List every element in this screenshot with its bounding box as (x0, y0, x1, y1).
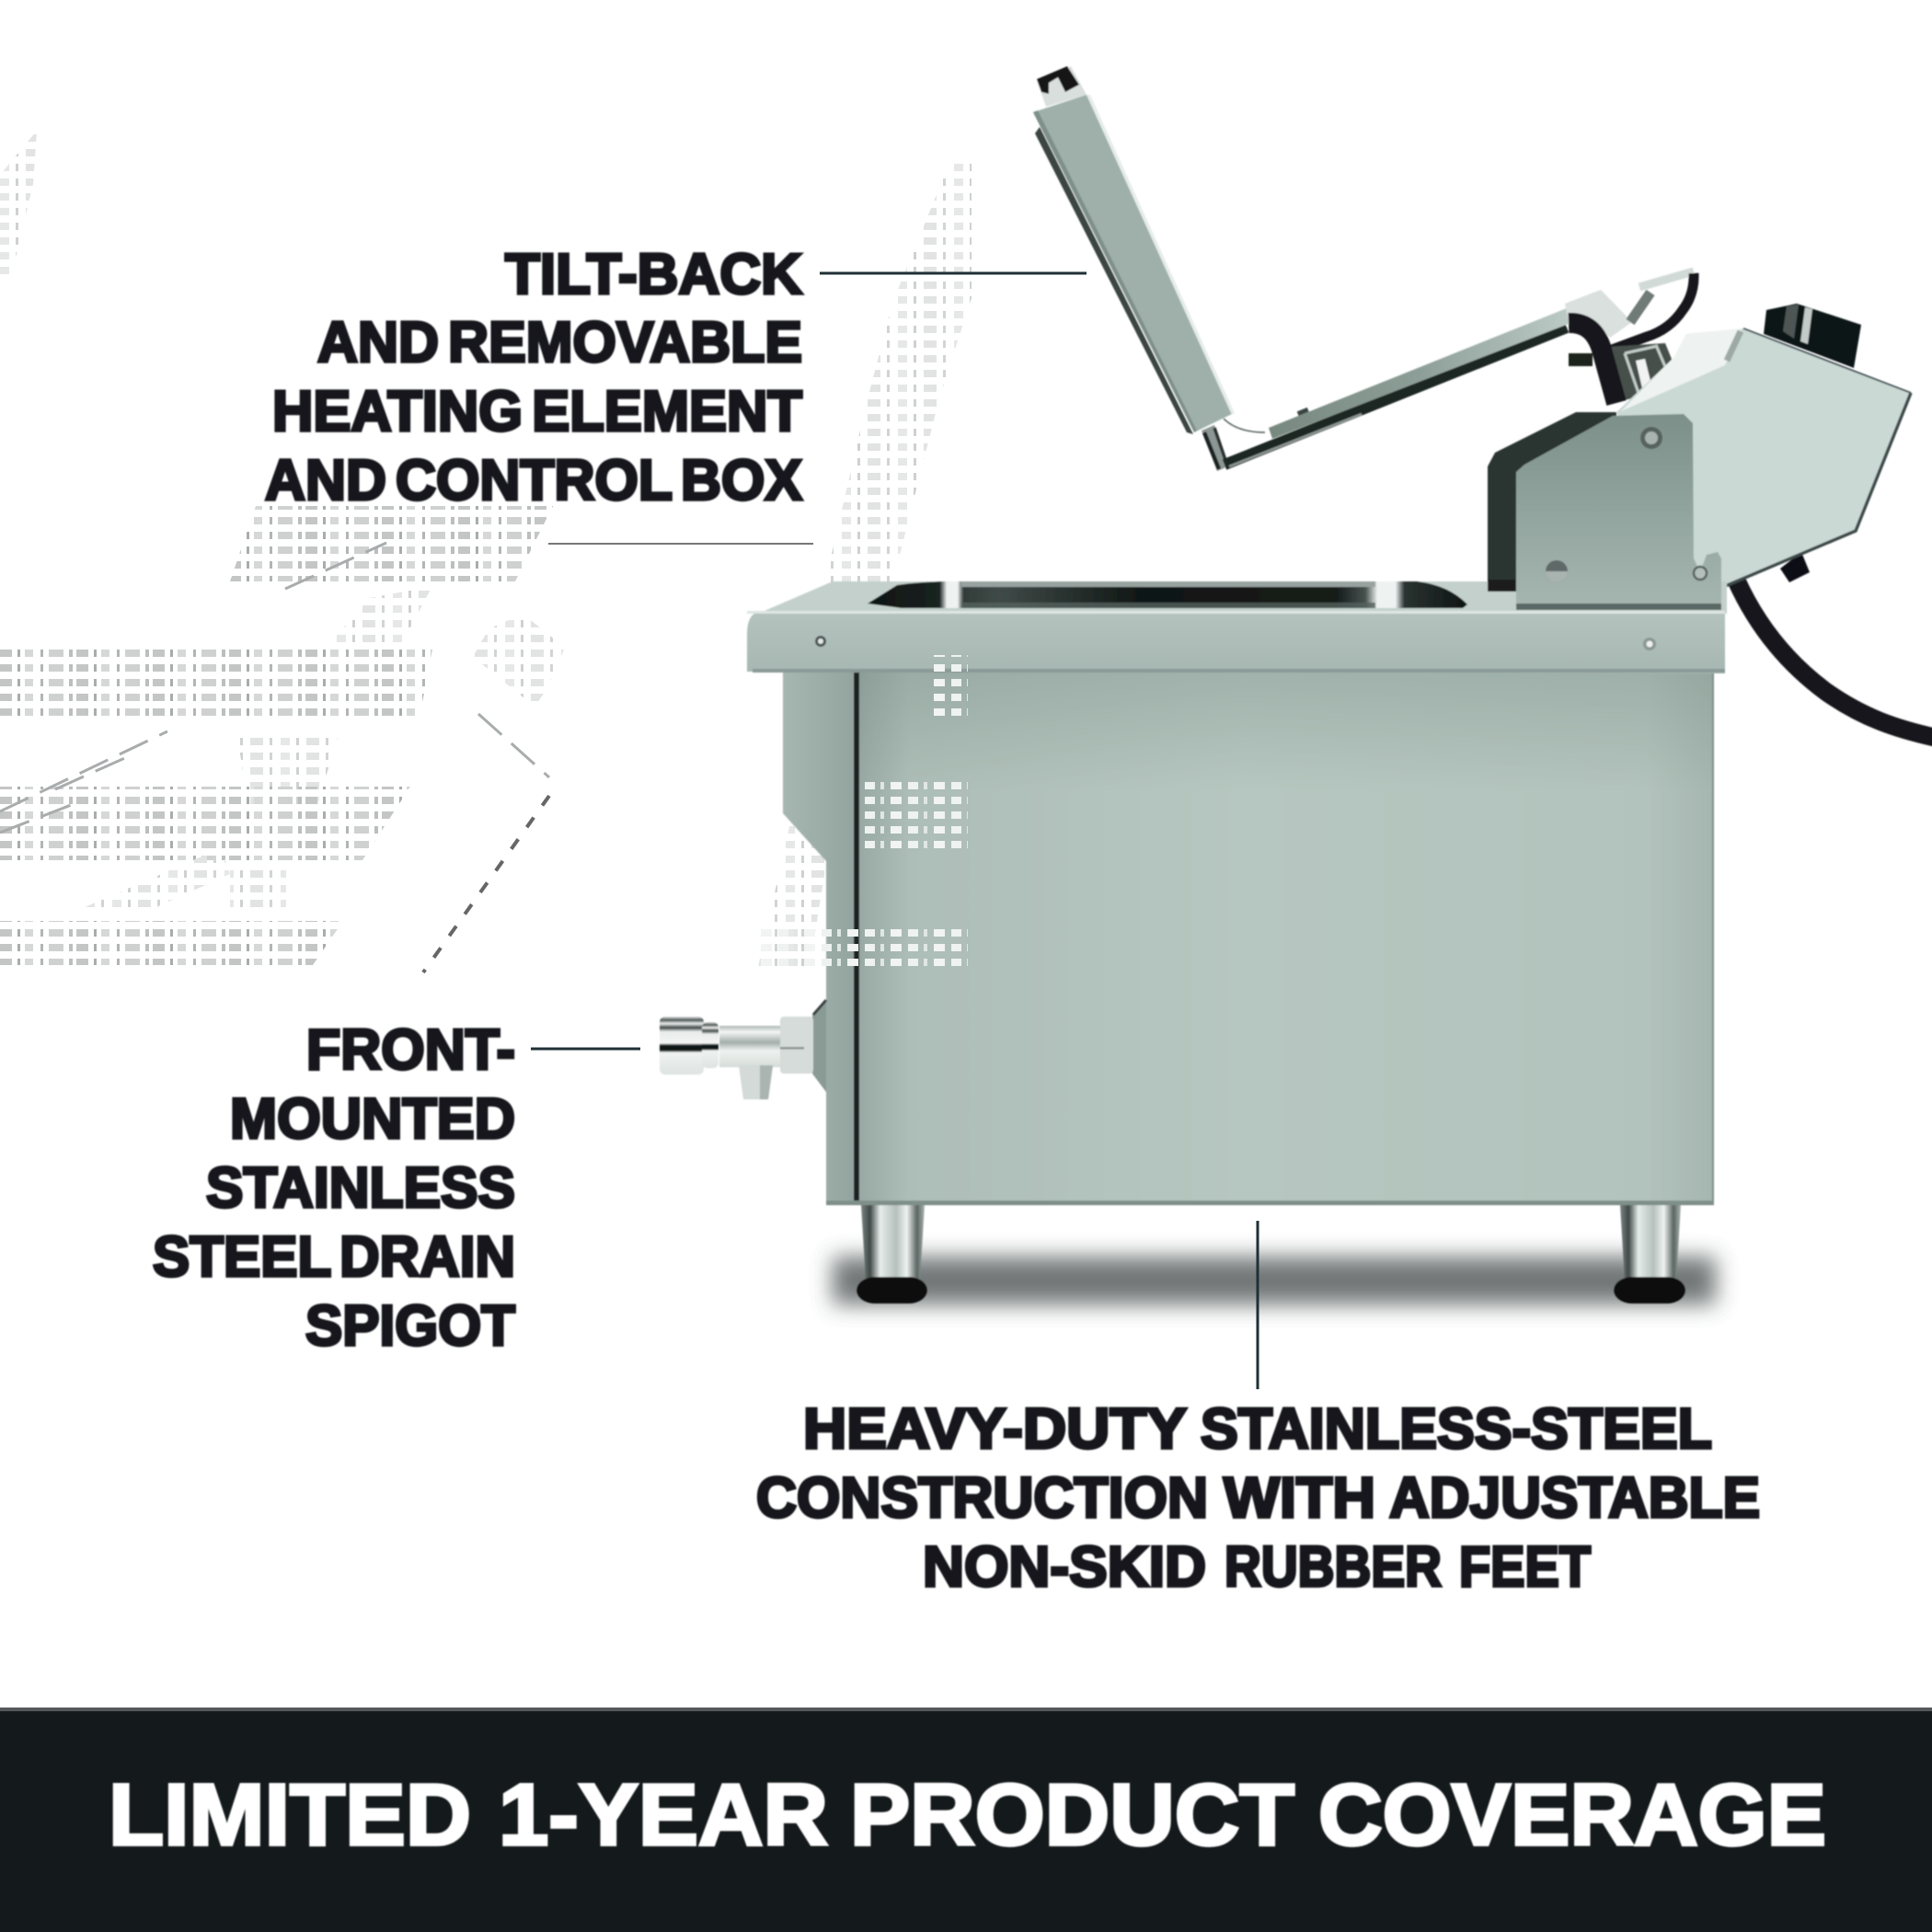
handle loop and brackets (1569, 271, 1694, 403)
drain spigot (660, 1000, 826, 1099)
label: stainless construction: CONSTRUCTION (756, 1466, 1208, 1530)
leader line: secondary grey (548, 543, 813, 545)
label: tilt-back heating element: AND REMOVABLE (317, 311, 802, 374)
label: drain spigot: MOUNTED (230, 1087, 515, 1151)
label: drain spigot: STEEL DRAIN (153, 1225, 515, 1289)
leader line: construction (1257, 1221, 1259, 1389)
label: stainless construction: STAINLESS-STEEL (1201, 1397, 1712, 1461)
label: stainless construction: RUBBER (1225, 1535, 1442, 1599)
label: stainless construction: FEET (1459, 1535, 1591, 1599)
floor shadow (833, 1257, 1716, 1305)
small switch under control box (1780, 552, 1810, 582)
footer banner (0, 1708, 1932, 1932)
leg and rubber foot: right (1614, 1205, 1685, 1304)
footer heading: 1-YEAR (499, 1766, 828, 1864)
footer heading (109, 1766, 1826, 1864)
leader line: heating element lid (820, 272, 1087, 274)
label: tilt-back heating element: TILT-BACK (505, 243, 802, 306)
leg and rubber foot: left (857, 1205, 927, 1304)
label: tilt-back heating element (265, 243, 802, 512)
label: stainless construction: WITH (1224, 1466, 1375, 1530)
control box (1616, 328, 1911, 587)
label: tilt-back heating element: HEATING ELEMENT (272, 380, 802, 443)
label: tilt-back heating element: AND CONTROL BOX (265, 449, 802, 512)
label: drain spigot (153, 1018, 515, 1358)
footer heading: PRODUCT (850, 1766, 1294, 1864)
fryer product illustration (660, 66, 1932, 1305)
label: stainless construction (756, 1397, 1760, 1599)
label: stainless construction: HEAVY-DUTY (803, 1397, 1187, 1461)
label: drain spigot: SPIGOT (305, 1294, 515, 1358)
label: drain spigot: STAINLESS (206, 1156, 515, 1220)
footer heading: LIMITED (109, 1766, 471, 1864)
cabinet body (783, 667, 1714, 1205)
ghost scan artifacts behind the fryer (0, 131, 972, 972)
label: stainless construction: NON-SKID (923, 1535, 1206, 1599)
lid of heating element (1033, 66, 1235, 434)
side bracket plate (1488, 412, 1721, 610)
label: stainless construction: ADJUSTABLE (1389, 1466, 1760, 1530)
heating arm and hinge (1202, 290, 1632, 471)
footer heading: COVERAGE (1318, 1766, 1826, 1864)
leader line: drain spigot (531, 1047, 640, 1051)
counter top and bowl (747, 581, 1727, 673)
on-body ghost artifacts (755, 655, 968, 967)
label: drain spigot: FRONT- (306, 1018, 515, 1082)
power cord (1736, 580, 1932, 738)
thermostat knob (1764, 304, 1861, 368)
